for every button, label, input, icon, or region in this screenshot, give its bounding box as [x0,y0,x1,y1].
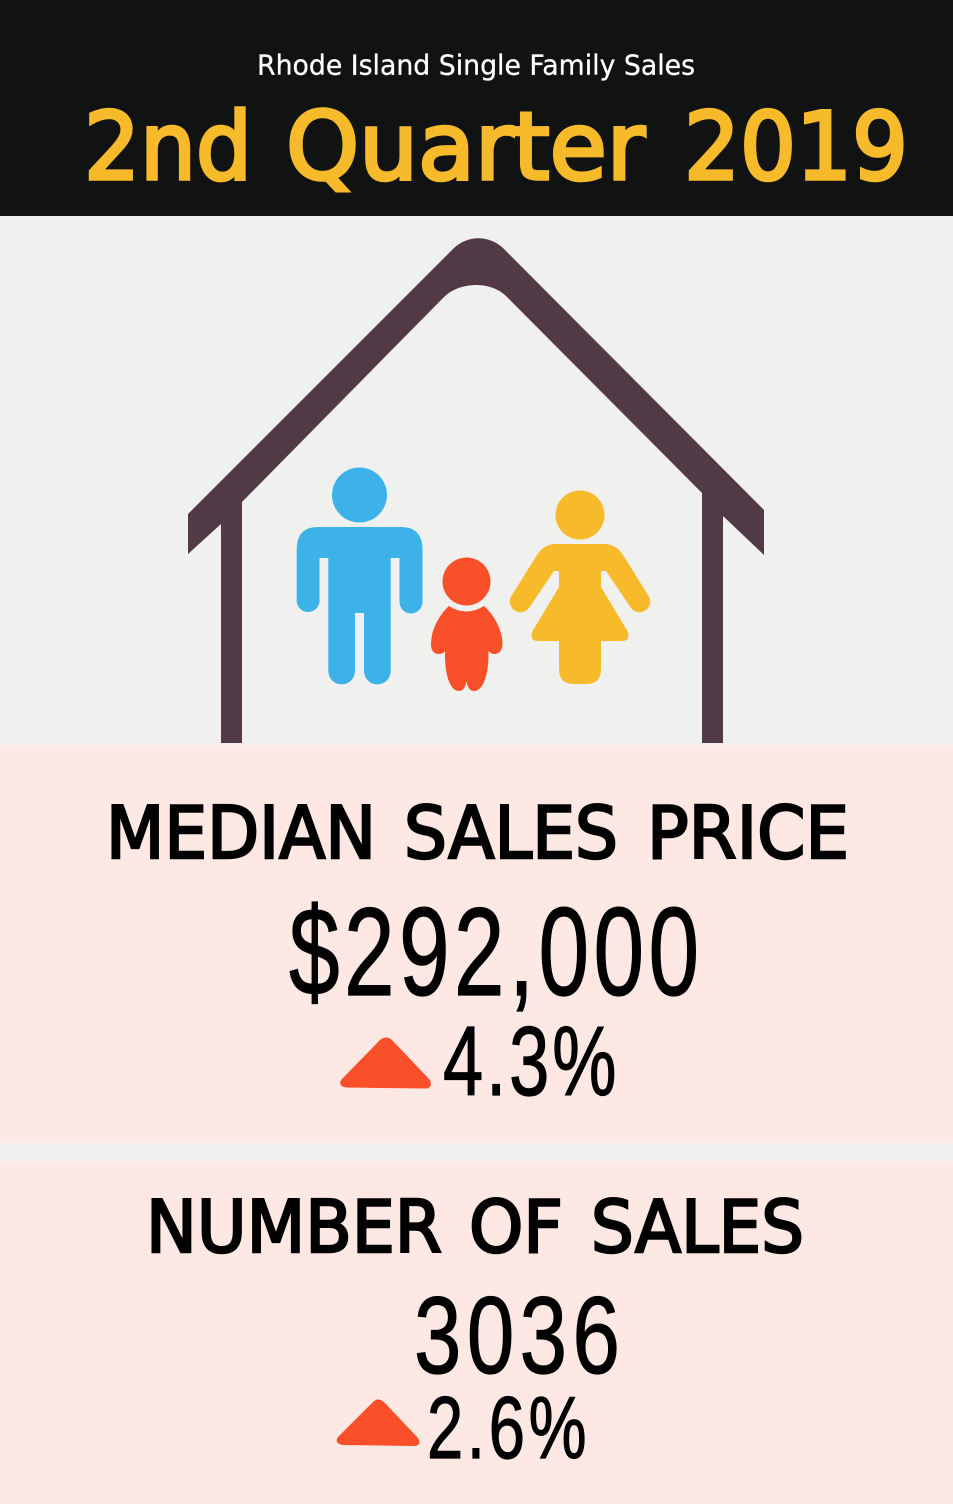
icon: family [297,468,650,691]
subtitle: Rhode Island Single Family Sales [257,48,695,82]
heading: PRICE [647,791,849,875]
change: 2.6% [427,1380,590,1477]
header band [0,0,953,216]
icon: child [431,558,502,691]
value: 3036 [414,1274,625,1396]
title: 2019 [684,93,908,202]
title: 2nd [84,93,252,202]
heading: SALES [404,791,618,875]
icon: father [297,468,422,684]
icon: mother [510,490,650,684]
title: Quarter [286,93,645,202]
heading: MEDIAN [106,791,376,875]
icon: house outline [188,238,764,743]
heading: OF [469,1185,563,1269]
heading: SALES [591,1185,804,1269]
icon: up triangle [340,1038,431,1088]
icon: up triangle [337,1400,419,1446]
heading: NUMBER [146,1185,442,1269]
panel: median sales price [0,745,953,1143]
value: $292,000 [289,883,703,1022]
change: 4.3% [443,1007,619,1117]
panel: number of sales [0,1161,953,1504]
